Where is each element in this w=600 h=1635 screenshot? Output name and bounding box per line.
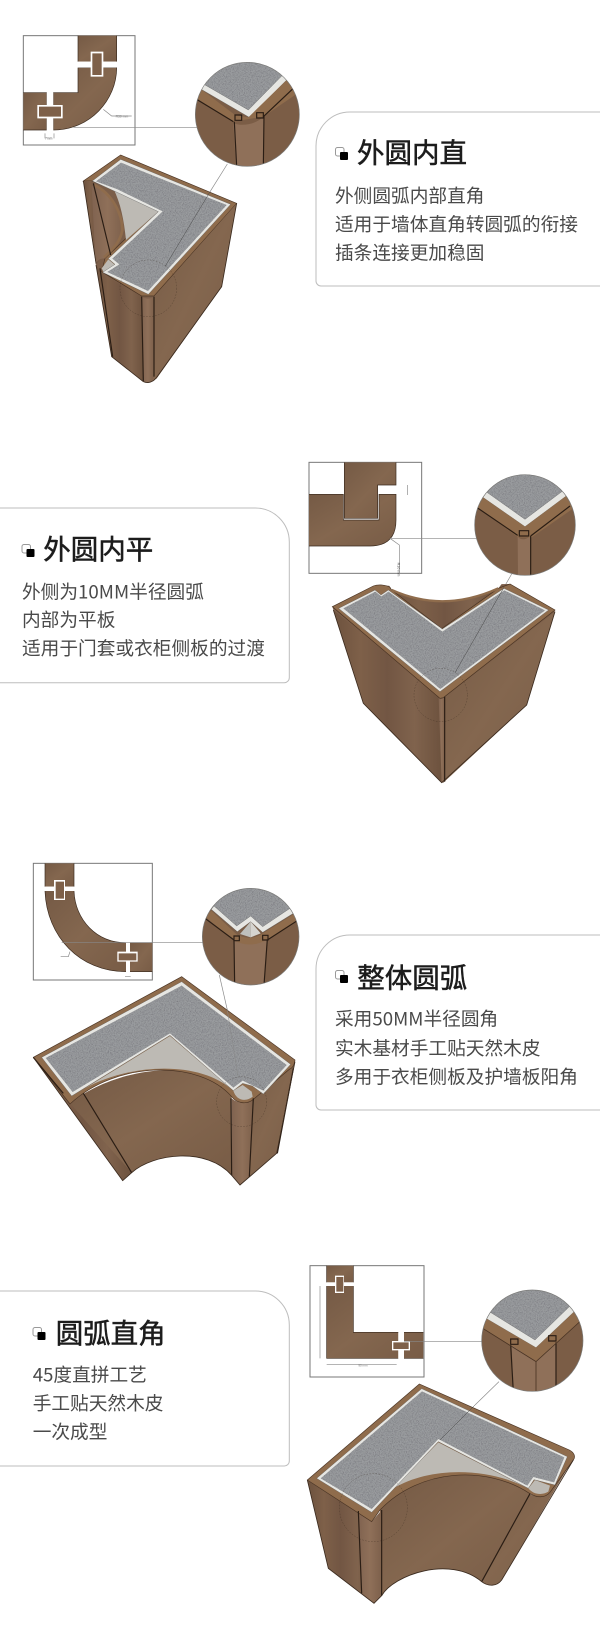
section 4: 圆弧直角 (0, 1266, 587, 1603)
icon: overlapped squares (336, 148, 348, 160)
corner block 4 (307, 1384, 575, 1603)
heading: 整体圆弧: 整体圆弧 (357, 956, 467, 996)
magnifier circle 2 (474, 474, 576, 576)
text block: description 1: 外侧圆弧内部直角 (335, 181, 484, 208)
text block: description 3: 多用于衣柜侧板及护墙板阳角 (335, 1063, 578, 1090)
illustration: section 4 drawings (307, 1266, 587, 1603)
cross-section box 1: R30 mm (116, 114, 128, 118)
heading: 外圆内平: 外圆内平 (43, 527, 153, 567)
cross-section box 2: R10 mm (396, 563, 400, 576)
magnifier circle 3 (202, 888, 300, 986)
text block: description 3: 实木基材手工贴天然木皮 (335, 1034, 541, 1061)
text block: description 4: 45度直拼工艺 (33, 1361, 147, 1388)
section 1: 外圆内直 (23, 36, 600, 383)
illustration: section 2 drawings (309, 462, 582, 783)
text block: description 2: 外侧为10MM半径圆弧 (22, 577, 204, 604)
corner block 2 (332, 584, 555, 783)
panel: 整体圆弧 text card (316, 935, 600, 1110)
leader line (73, 126, 235, 128)
heading: 圆弧直角: 圆弧直角 (56, 1311, 166, 1351)
cross-section box 4: 90 mm (358, 1363, 368, 1367)
text block: description 2 (22, 577, 265, 661)
icon: overlapped squares (336, 970, 348, 983)
leader lines (404, 1341, 513, 1343)
text block: description 2: 内部为平板 (22, 606, 116, 633)
magnifier circle 1 (193, 60, 303, 170)
text block: description 4: 一次成型 (33, 1417, 107, 1444)
corner block 3 (33, 977, 295, 1185)
cross-section box 4 (310, 1266, 424, 1377)
cross-section box 3 (33, 863, 152, 980)
section 3: 整体圆弧 (33, 863, 600, 1185)
corner block 1 (83, 155, 237, 383)
leader lines (390, 537, 520, 539)
text block: description 1: 插条连接更加稳固 (335, 238, 484, 266)
text block: description 1 (335, 181, 578, 266)
cross-section box 1 (23, 36, 135, 145)
text block: description 2: 适用于门套或衣柜侧板的过渡 (22, 634, 265, 661)
illustration: section 3 drawings (33, 863, 303, 1185)
panel: 圆弧直角 text card (0, 1291, 289, 1466)
panel: 外圆内直 text card (316, 112, 600, 286)
text block: description 1: 适用于墙体直角转圆弧的衔接 (335, 210, 578, 237)
text block: description 4 (33, 1361, 164, 1444)
illustration: section 1 drawings (23, 36, 303, 383)
text block: description 3: 采用50MM半径圆角 (335, 1005, 498, 1032)
section 2: 外圆内平 (0, 462, 582, 783)
icon: overlapped squares (22, 544, 34, 557)
magnifier circle 4 (480, 1288, 587, 1395)
leader lines (62, 942, 237, 944)
heading: 外圆内直: 外圆内直 (357, 130, 467, 170)
panel: 外圆内平 text card (0, 508, 289, 683)
cross-section box 1: 7mm (45, 136, 53, 140)
text block: description 3 (335, 1005, 578, 1090)
text block: description 4: 手工贴天然木皮 (33, 1389, 164, 1416)
icon: overlapped squares (33, 1328, 46, 1340)
cross-section box 2 (309, 462, 422, 576)
